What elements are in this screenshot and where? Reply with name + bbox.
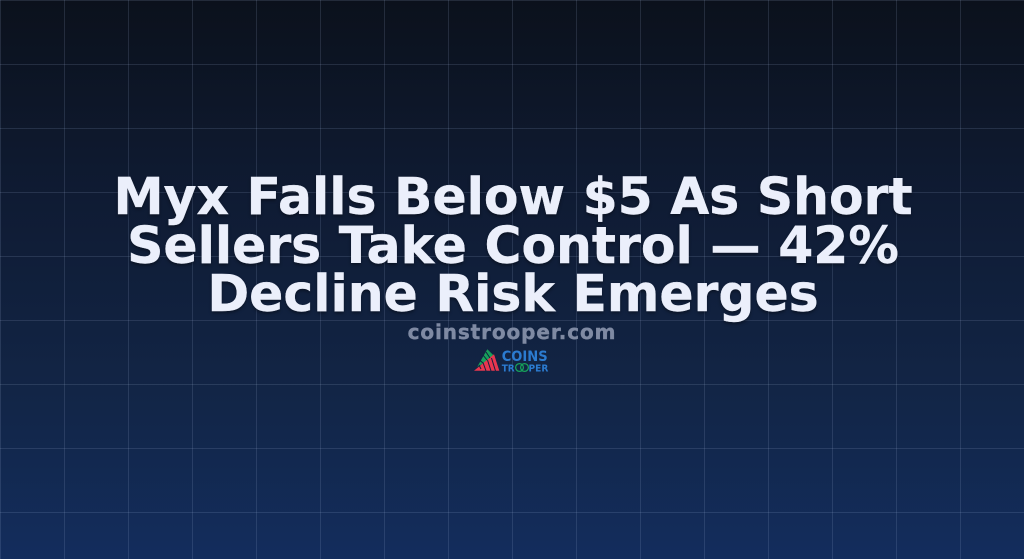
title: Decline Risk Emerges	[207, 264, 819, 323]
logo wordmark: COINS	[502, 349, 548, 365]
logo wordmark: PER	[528, 364, 549, 374]
website label: coinstrooper.com	[408, 320, 616, 344]
title	[113, 167, 913, 324]
title: Myx Falls Below $5 As Short	[113, 167, 913, 226]
icon: coinstrooper logo	[474, 349, 549, 374]
logo mark: green and red diagonal stripes	[474, 349, 499, 371]
logo wordmark: TR	[502, 364, 515, 374]
title: Sellers Take Control — 42%	[127, 216, 899, 275]
logo wordmark	[502, 349, 549, 374]
